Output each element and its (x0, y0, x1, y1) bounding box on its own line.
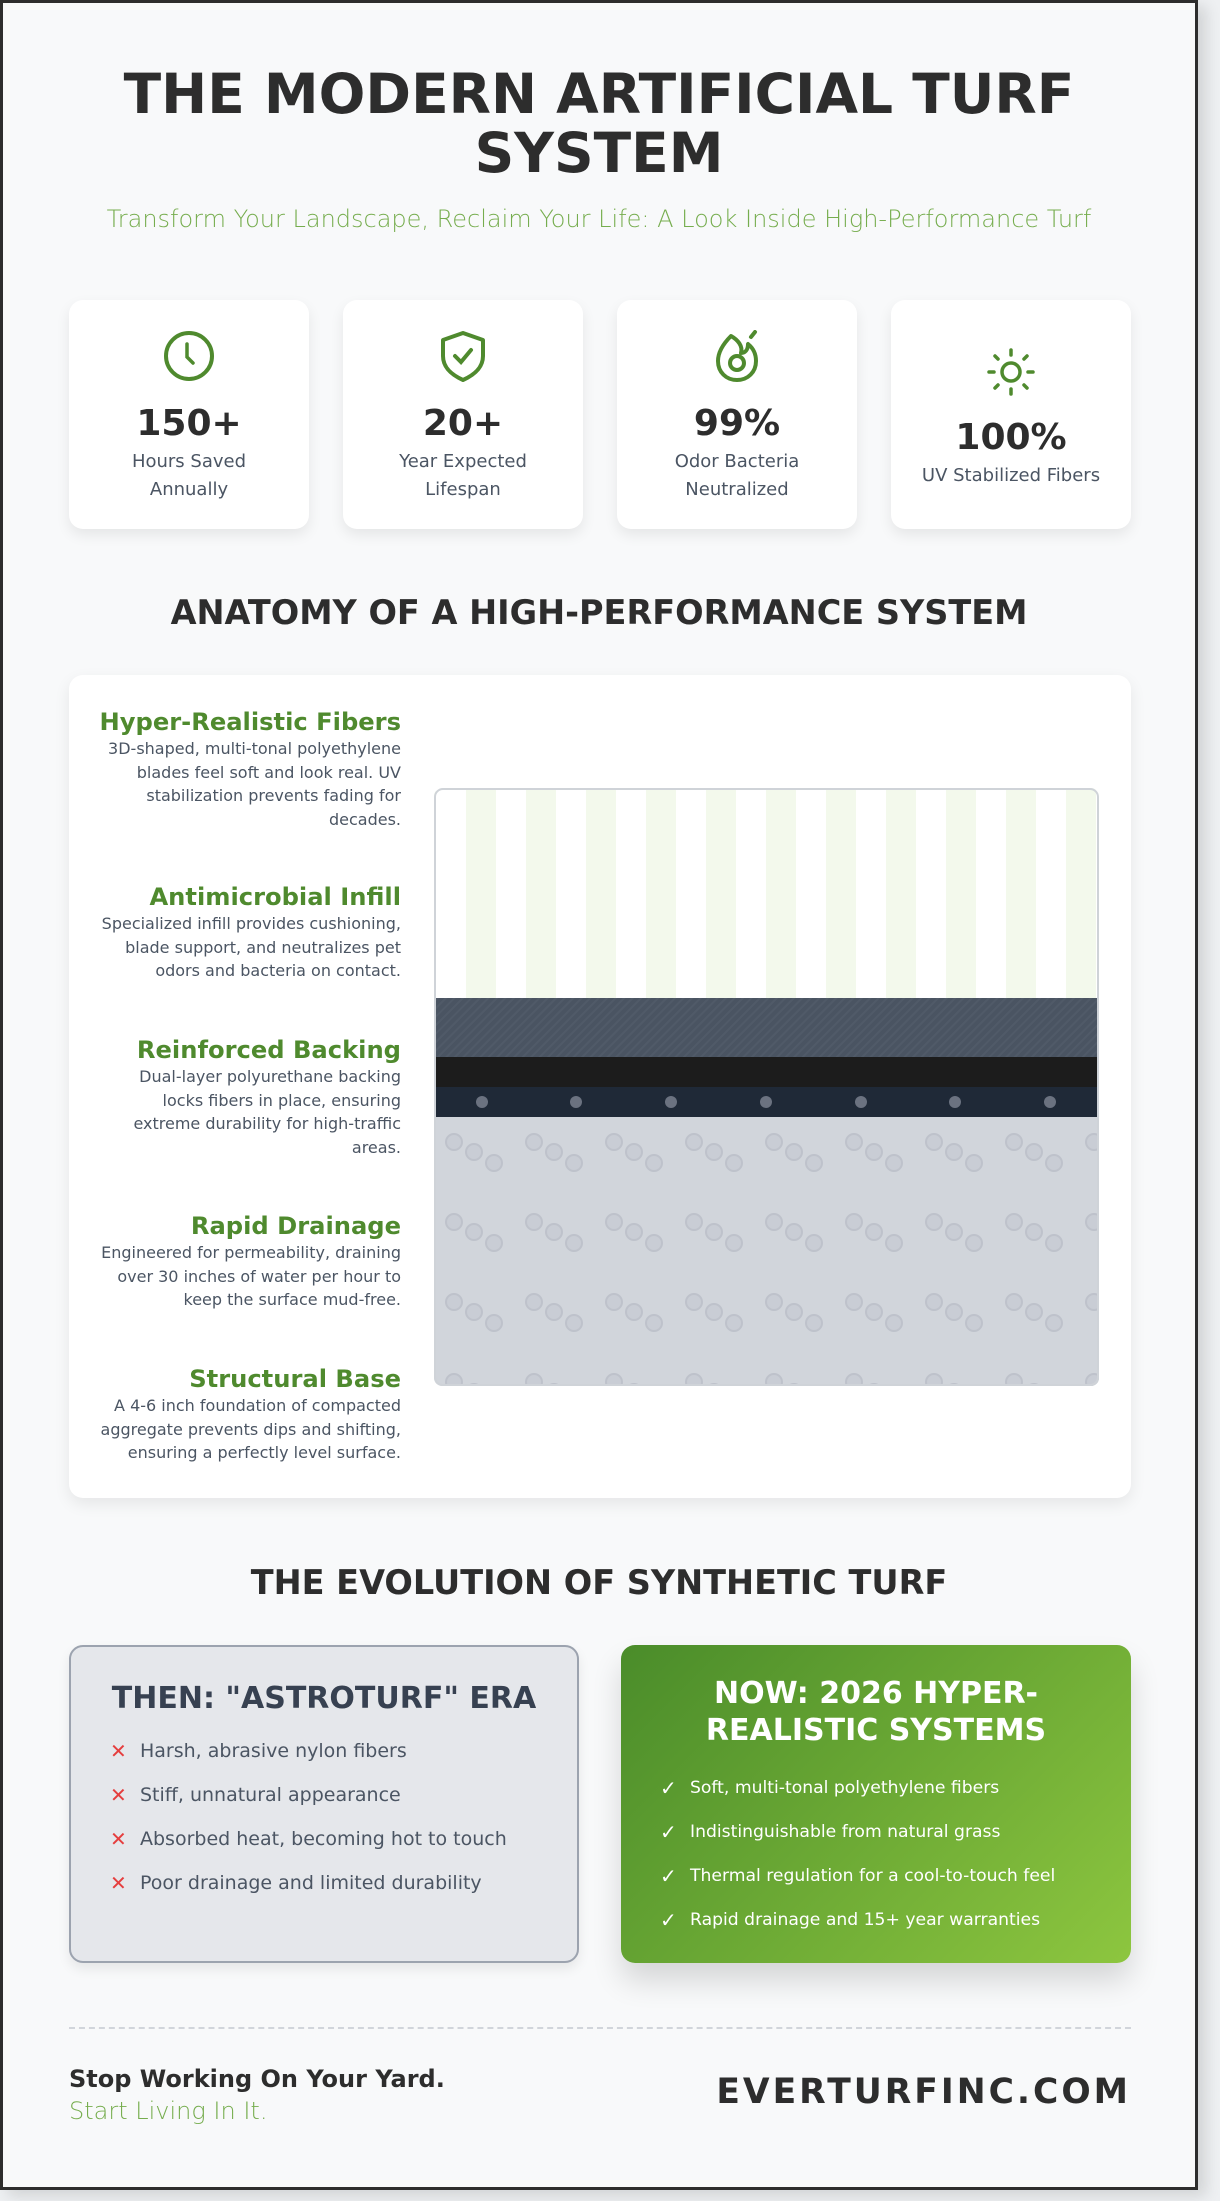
icon: shield (441, 331, 485, 382)
layer text: base: A 4-6 inch foundation of compacted (114, 1396, 401, 1415)
stat card: UV: 100% (955, 417, 1067, 458)
layer text: drainage: Engineered for permeability, draining (101, 1243, 401, 1262)
stat card: hours (69, 300, 309, 529)
layer text: backing: Reinforced Backing (137, 1036, 401, 1064)
layer text: fibers: blades feel soft and look real. UV (137, 762, 401, 782)
layer text: infill (102, 883, 401, 980)
panel: then: ✕ (110, 1871, 127, 1895)
list: now items (660, 1776, 1055, 1932)
layer text: fibers: decades. (329, 810, 401, 828)
panel: then: ✕ (110, 1827, 127, 1851)
layer text: base: aggregate prevents dips and shifting, (101, 1420, 401, 1438)
subtitle: Transform Your Landscape, Reclaim Your Life: A Look Inside High-Performance Turf (107, 205, 1091, 233)
layer text: backing: locks fibers in place, ensuring (163, 1090, 401, 1110)
list: then items: Poor drainage and limited durability (140, 1872, 482, 1894)
footer tagline (69, 2065, 445, 2125)
stat card: hours: 150+ (136, 403, 242, 444)
layer text: backing: extreme durability for high-traffic (133, 1114, 401, 1133)
stat card: lifespan: 20+ (423, 403, 503, 444)
heading: anatomy: ANATOMY OF A HIGH-PERFORMANCE SYSTEM (171, 593, 1027, 632)
icon: clock (164, 331, 214, 381)
layer text: fibers (100, 708, 401, 828)
stat card: lifespan (343, 300, 583, 529)
list: then items: Stiff, unnatural appearance (140, 1784, 401, 1806)
list: now items: Indistinguishable from natural grass (690, 1822, 1000, 1842)
list: now items: Soft, multi-tonal polyethylene fibers (690, 1778, 999, 1798)
layer text: fibers: Hyper-Realistic Fibers (100, 708, 401, 736)
layer text: fibers: 3D-shaped, multi-tonal polyethylene (108, 739, 401, 758)
layer text: base: Structural Base (189, 1365, 401, 1393)
panel: then (69, 1645, 579, 1963)
title (124, 62, 1074, 185)
panel: then: ✕ (110, 1739, 127, 1763)
title: SYSTEM (475, 121, 723, 185)
stat card: lifespan: Lifespan (425, 479, 501, 500)
title: THE MODERN ARTIFICIAL TURF (124, 62, 1074, 126)
icon: flame (716, 330, 758, 382)
layer text: drainage (101, 1212, 401, 1309)
stat card: hours: Annually (150, 479, 228, 500)
panel: now: ✓ (660, 1864, 677, 1888)
stat card: UV (891, 300, 1131, 529)
list: now items: Thermal regulation for a cool-to-touch feel (690, 1866, 1055, 1886)
layer text: base: ensuring a perfectly level surface. (128, 1443, 401, 1462)
stat card: odor: 99% (694, 403, 780, 444)
layer text: infill: odors and bacteria on contact. (155, 961, 401, 980)
diagram: turf layers (434, 788, 1099, 1386)
icon: sun (987, 348, 1035, 396)
panel: anatomy (69, 675, 1131, 1498)
layer text: drainage: Rapid Drainage (191, 1212, 401, 1240)
list: then items: Absorbed heat, becoming hot to touch (140, 1828, 507, 1850)
footer website: EVERTURFINC.COM (716, 2072, 1131, 2112)
panel: now: REALISTIC SYSTEMS (706, 1713, 1046, 1748)
panel: now: ✓ (660, 1908, 677, 1932)
layer text: infill: Specialized infill provides cushioning, (102, 914, 401, 933)
panel: then: ✕ (110, 1783, 127, 1807)
layer text: base (101, 1365, 401, 1462)
footer tagline: Start Living In It. (69, 2097, 267, 2125)
panel: now: ✓ (660, 1776, 677, 1800)
layer text: backing: Dual-layer polyurethane backing (139, 1067, 401, 1086)
list: then items (110, 1739, 507, 1895)
heading: evolution: THE EVOLUTION OF SYNTHETIC TURF (251, 1563, 947, 1602)
panel: then: THEN: "ASTROTURF" ERA (112, 1681, 536, 1716)
stat card: odor: Odor Bacteria (675, 451, 799, 472)
stat card: odor (617, 300, 857, 529)
stat card: odor: Neutralized (685, 479, 789, 500)
panel: now: NOW: 2026 HYPER- (714, 1676, 1038, 1711)
stat card: lifespan: Year Expected (399, 451, 527, 472)
stat card: hours: Hours Saved (132, 451, 246, 472)
panel: now (621, 1645, 1131, 1963)
layer text: fibers: stabilization prevents fading for (146, 786, 401, 805)
layer text: backing: areas. (352, 1138, 401, 1156)
footer tagline: Stop Working On Your Yard. (69, 2065, 445, 2093)
layer text: drainage: keep the surface mud-free. (184, 1290, 401, 1309)
panel: now: ✓ (660, 1820, 677, 1844)
list: then items: Harsh, abrasive nylon fibers (140, 1740, 407, 1762)
layer text: infill: Antimicrobial Infill (149, 883, 401, 911)
layer text: infill: blade support, and neutralizes pet (125, 938, 401, 956)
layer text: backing (133, 1036, 401, 1156)
list: now items: Rapid drainage and 15+ year warranties (690, 1910, 1040, 1930)
stat card: UV: UV Stabilized Fibers (922, 465, 1100, 486)
layer text: drainage: over 30 inches of water per hour to (117, 1266, 401, 1286)
